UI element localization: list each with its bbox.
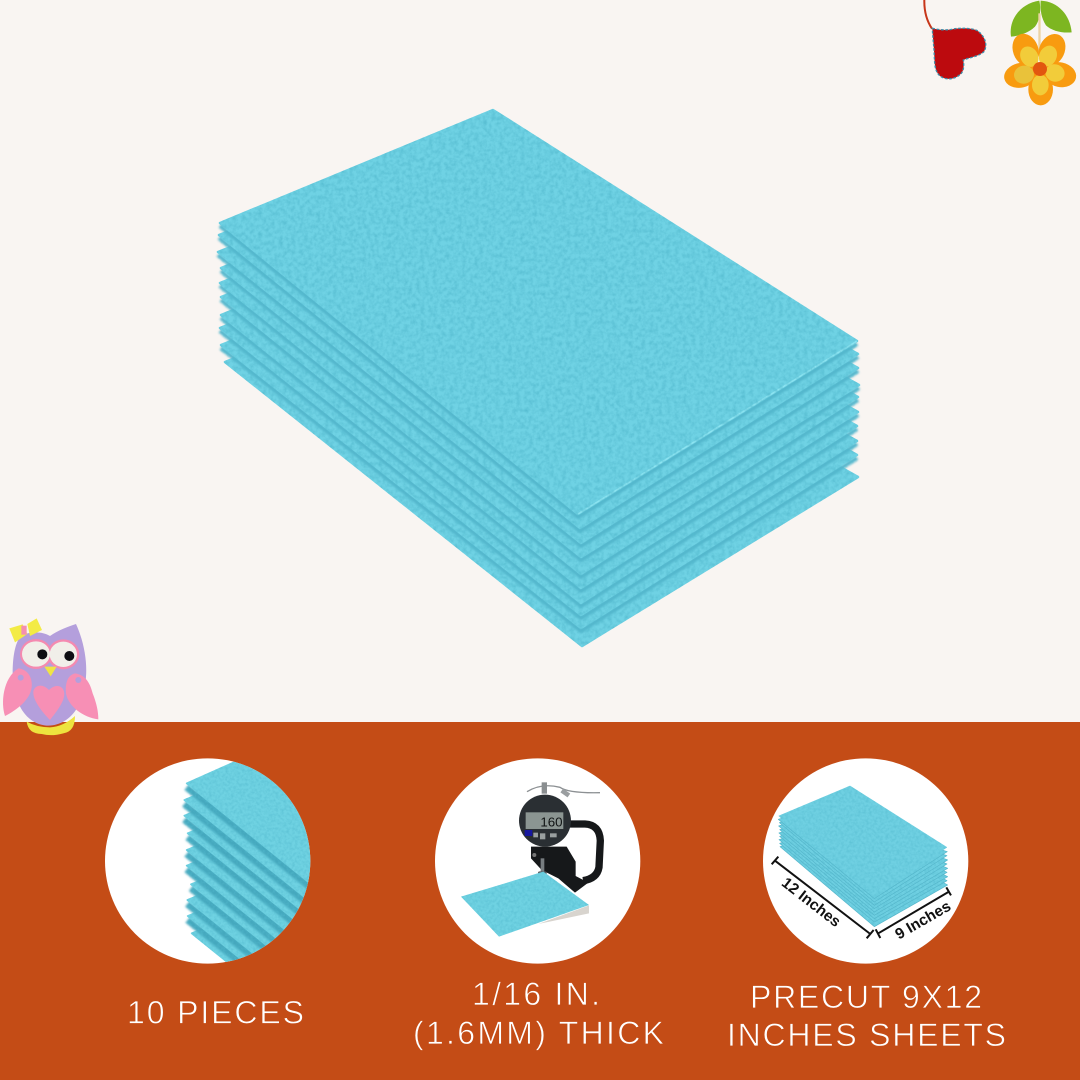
caption: sheet size: INCHES SHEETS	[727, 1017, 1006, 1053]
gauge lever and knob	[527, 782, 600, 797]
dimension: 9 inches	[876, 887, 954, 943]
dimension: 9 inches: 9 Inches	[892, 898, 954, 943]
mini stack of sheets	[778, 786, 948, 927]
felt sheet under gauge	[461, 872, 589, 937]
circle 3: stack with dimensions	[763, 758, 968, 964]
decoration: purple felt owl	[3, 618, 98, 735]
caption: 10 pieces: 10 PIECES	[127, 994, 304, 1030]
gauge frame	[531, 824, 600, 893]
caption: sheet size	[727, 979, 1006, 1053]
gauge dial with reading	[519, 795, 571, 847]
gauge dial with reading: 160	[540, 814, 563, 829]
dimension: 12 inches: 12 Inches	[778, 874, 844, 931]
decoration: red felt heart on a string	[924, 0, 986, 79]
caption: thickness: (1.6MM) THICK	[413, 1015, 664, 1051]
caption: sheet size: PRECUT 9X12	[750, 979, 982, 1015]
circle 2: thickness gauge measuring a felt sheet	[435, 758, 640, 964]
bottom orange panel	[0, 722, 1080, 1080]
caption: thickness: 1/16 IN.	[472, 976, 600, 1012]
background	[0, 0, 1080, 722]
circle 1: close-up of sheet edges	[105, 758, 310, 964]
dimension: 12 inches	[772, 857, 874, 938]
decoration: orange felt flower with green leaves	[1002, 1, 1079, 105]
main product: stack of ten blue felt sheets	[218, 110, 859, 646]
caption: thickness	[413, 976, 664, 1051]
